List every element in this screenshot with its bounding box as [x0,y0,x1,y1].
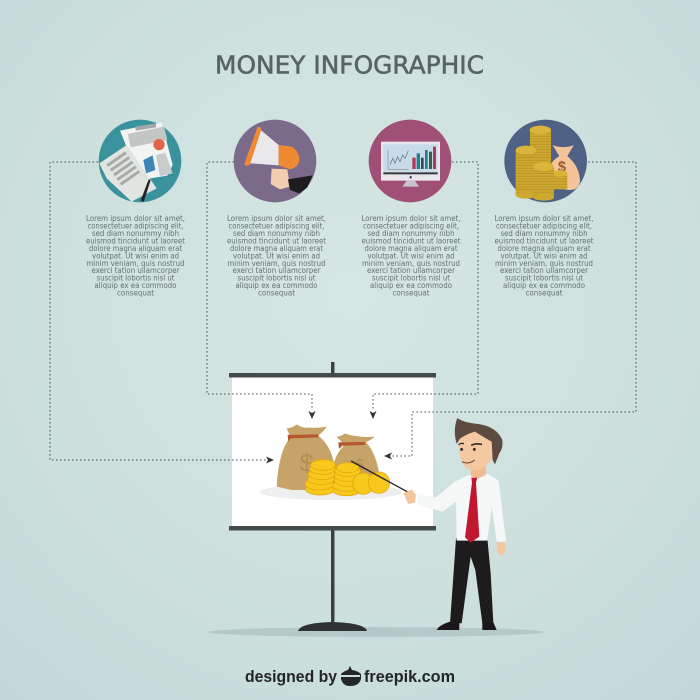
text block 2: consequat [258,289,295,298]
text block 4: exerci tation ullamcorper [500,266,589,275]
icon: monitor chart [369,120,451,202]
text block 4: minim veniam, quis nostrud [495,259,593,268]
text block 1: aliquip ex ea commodo [94,281,177,290]
text block 2: sed diam nonummy nibh [233,229,320,238]
text block 3: sed diam nonummy nibh [368,229,455,238]
connector: coins to board [384,162,636,460]
connector: megaphone to board [207,162,316,419]
pointing hand [403,489,416,504]
neck [471,463,486,478]
hair [455,418,503,464]
bag: left [277,424,337,490]
text block 1: consequat [117,289,154,298]
text block 2: exerci tation ullamcorper [232,266,321,275]
text block 3: suscipit lobortis nisl ut [372,274,450,283]
necktie [465,478,479,543]
text block 2: minim veniam, quis nostrud [228,259,326,268]
smile [462,460,475,463]
text block 3: dolore magna aliquam erat [364,244,458,253]
text block 3: consectetuer adipiscing elit, [363,222,459,230]
text block 1: exerci tation ullamcorper [92,266,180,275]
icon: coins and bag: $ [558,160,566,176]
footer credit [245,666,455,686]
eyes [458,443,482,451]
text block 4: suscipit lobortis nisl ut [505,274,583,283]
text block 4: consectetuer adipiscing elit, [496,222,592,230]
text block 3: exerci tation ullamcorper [367,266,456,275]
connector: monitor to board [370,162,478,419]
text block 3: aliquip ex ea commodo [370,281,452,290]
text block 1: Lorem ipsum dolor sit amet, [86,214,185,223]
icon: megaphone [234,120,316,202]
text block 4: dolore magna aliquam erat [498,244,591,253]
bag: right [334,433,380,490]
plate [260,484,402,500]
text block 3: volutpat. Ut wisi enim ad [368,251,455,260]
text block 2: euismod tincidunt ut laoreet [227,236,326,245]
text block 3: euismod tincidunt ut laoreet [362,236,461,245]
right hand [497,542,505,557]
text block 4: Lorem ipsum dolor sit amet, [494,214,594,223]
text block 4 [494,214,594,298]
text block 1 [86,214,185,298]
shirt with arm [417,473,506,542]
text block 4: sed diam nonummy nibh [500,229,588,238]
ear [490,446,499,461]
face [458,429,493,470]
text block 3 [362,214,461,298]
presentation board [229,362,436,631]
trousers [450,538,493,623]
bag: left: $ [300,450,314,478]
bag: right: $ [356,457,365,474]
text block 3: Lorem ipsum dolor sit amet, [362,214,460,223]
text block 2: consectetuer adipiscing elit, [228,222,324,230]
presenter figure [403,418,506,630]
text block 2: aliquip ex ea commodo [236,281,318,290]
text block 1: euismod tincidunt ut laoreet [86,236,185,245]
text block 2: suscipit lobortis nisl ut [238,274,316,283]
text block 2: Lorem ipsum dolor sit amet, [227,214,326,223]
icon: documents [99,120,181,202]
coin stack middle [333,463,361,496]
pointer stick [351,461,409,493]
text block 1: suscipit lobortis nisl ut [96,274,175,283]
footer credit: designed by [245,668,338,686]
coin stack left [305,460,335,495]
text block 4: euismod tincidunt ut laoreet [494,236,594,245]
ground shadow [208,627,544,637]
connector: documents to board [50,162,274,464]
text block 3: consequat [392,289,430,298]
footer credit: freepik.com [364,668,455,686]
coins upright [353,472,390,494]
text block 3: minim veniam, quis nostrud [362,259,460,268]
text block 4: consequat [526,289,563,298]
icon: freepik mascot [341,666,361,686]
text block 1: volutpat. Ut wisi enim ad [92,251,179,260]
text block 1: sed diam nonummy nibh [92,229,179,238]
text block 2: volutpat. Ut wisi enim ad [233,251,320,260]
text block 2: dolore magna aliquam erat [230,244,323,253]
text block 4: volutpat. Ut wisi enim ad [500,251,588,260]
text block 2 [227,214,326,298]
text block 4: aliquip ex ea commodo [503,281,585,290]
text block 1: consectetuer adipiscing elit, [88,222,184,230]
shoes [437,622,497,630]
text block 1: minim veniam, quis nostrud [86,259,185,268]
icon: coins and bag [504,120,587,202]
title: MONEY INFOGRAPHIC [215,50,484,80]
money bags and coins [260,424,409,500]
text block 1: dolore magna aliquam erat [89,244,182,253]
